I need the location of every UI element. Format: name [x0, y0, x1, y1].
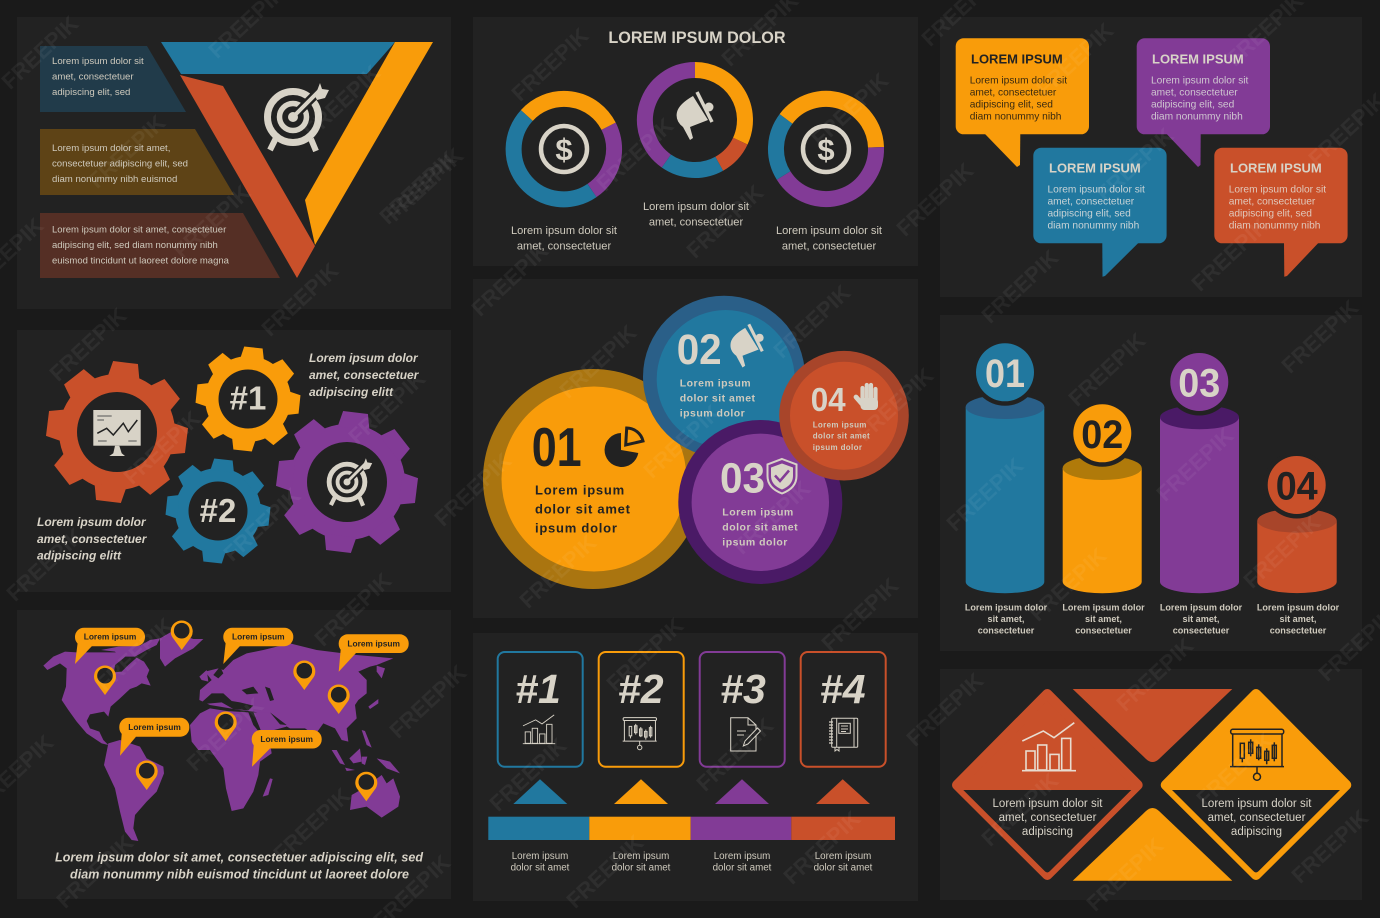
map caption — [55, 851, 423, 882]
circle 04 — [779, 351, 909, 481]
cylinder captions: sit amet, — [1183, 614, 1219, 624]
bar captions: dolor sit amet — [612, 862, 671, 873]
cylinder captions: Lorem ipsum dolor — [1257, 603, 1340, 613]
circle 03: Lorem ipsum — [722, 507, 794, 519]
circle 04: Lorem ipsum — [813, 420, 867, 429]
bubble: purple: LOREM IPSUM — [1152, 51, 1244, 66]
card #1: #1 — [515, 666, 561, 712]
watermarks: FREEPIK — [484, 733, 571, 816]
bubble: orange — [956, 38, 1089, 167]
bubble: orange: adipiscing elit, sed — [970, 100, 1053, 110]
text band: blue: adipiscing elit, sed — [52, 87, 130, 98]
watermarks: FREEPIK — [591, 113, 678, 196]
watermarks: FREEPIK — [181, 693, 268, 776]
bubble: red: amet, consectetuer — [1229, 197, 1316, 208]
text band: brown: consectetuer adipiscing elit, sed — [52, 158, 188, 170]
map: americas — [43, 632, 203, 841]
text band: maroon: euismod tincidunt ut laoreet dolore magna — [52, 256, 230, 266]
bubble: orange: LOREM IPSUM — [971, 51, 1063, 66]
bubble: orange: diam nonummy nibh — [970, 112, 1061, 122]
cylinder 02: 02 — [1081, 413, 1123, 457]
watermarks: FREEPIK — [1186, 213, 1273, 296]
watermarks: FREEPIK — [816, 573, 903, 656]
triangle segment: orange — [305, 42, 433, 245]
watermarks: FREEPIK — [298, 60, 385, 143]
diamond: orange — [1166, 694, 1346, 875]
watermarks: FREEPIK — [806, 68, 893, 151]
watermarks: FREEPIK — [218, 483, 305, 566]
panel: gears — [17, 330, 451, 592]
circle 03: ipsum dolor — [722, 537, 788, 549]
circle 02: 02 — [677, 326, 722, 374]
callout: label 1: Lorem ipsum — [84, 632, 136, 642]
bubble: blue — [1033, 148, 1167, 277]
segmented bar — [488, 817, 895, 840]
bubble: red: diam nonummy nibh — [1229, 221, 1320, 232]
pin: australia — [355, 772, 377, 801]
watermarks: FREEPIK — [168, 180, 255, 263]
panel: donut charts — [473, 17, 918, 266]
circle 03: dolor sit amet — [722, 522, 798, 534]
bar captions: Lorem ipsum — [512, 851, 568, 862]
triangle segment: blue — [161, 42, 395, 74]
donut 3: $ — [817, 132, 835, 167]
bubble: orange: Lorem ipsum dolor sit — [970, 76, 1067, 86]
watermarks: FREEPIK — [1031, 18, 1118, 101]
bar captions: Lorem ipsum — [613, 851, 669, 862]
watermarks: FREEPIK — [1286, 805, 1373, 888]
bubble: blue: Lorem ipsum dolor sit — [1048, 185, 1145, 196]
circle 02 — [643, 296, 805, 458]
watermarks: FREEPIK — [561, 830, 648, 913]
watermarks: FREEPIK — [429, 448, 516, 531]
text band: blue: amet, consectetuer — [52, 72, 134, 82]
pin: south america — [136, 760, 158, 790]
text: lower left: adipiscing elitt — [37, 548, 122, 562]
cylinder captions: consectetuer — [1075, 625, 1132, 635]
watermarks: FREEPIK — [768, 280, 855, 363]
cylinder 03: 03 — [1178, 362, 1220, 406]
gear: yellow #1: #1 — [230, 380, 266, 416]
gear: blue #2 — [161, 454, 275, 568]
gear: red with monitor — [39, 354, 195, 510]
icon: target — [268, 83, 329, 151]
text: lower left — [37, 515, 148, 562]
diamond: orange: amet, consectetuer — [1208, 812, 1306, 824]
cylinder 04 — [1257, 452, 1337, 593]
donut 1 — [514, 99, 614, 199]
callout: label 4 — [119, 718, 189, 756]
cylinder 01: 01 — [985, 352, 1025, 396]
cylinder captions: sit amet, — [1280, 614, 1316, 624]
bubble: purple: adipiscing elit, sed — [1151, 100, 1235, 110]
bar captions: Lorem ipsum — [714, 851, 770, 862]
panel: target triangle — [17, 17, 451, 309]
watermarks: FREEPIK — [343, 366, 430, 449]
cylinder captions — [965, 603, 1340, 635]
watermarks: FREEPIK — [1276, 295, 1363, 378]
watermarks: FREEPIK — [691, 713, 778, 796]
card #3 — [700, 652, 785, 767]
watermarks: FREEPIK — [1091, 123, 1178, 206]
cylinder captions: Lorem ipsum dolor — [1062, 603, 1145, 613]
bubble: blue: adipiscing elit, sed — [1048, 209, 1131, 220]
pins — [94, 620, 377, 801]
watermarks: FREEPIK — [514, 530, 601, 613]
callout: label 1 — [75, 628, 145, 664]
cylinder captions: Lorem ipsum dolor — [1160, 603, 1243, 613]
watermarks: FREEPIK — [1063, 328, 1150, 411]
donut captions: Lorem ipsum dolor sit — [776, 225, 882, 237]
watermarks: FREEPIK — [268, 783, 355, 866]
text band: maroon: adipiscing elit, sed diam nonummy nibh — [52, 240, 218, 251]
callout: label 2: Lorem ipsum — [232, 632, 285, 642]
bubble: blue: amet, consectetuer — [1048, 197, 1135, 208]
panel: diamonds — [940, 669, 1362, 900]
bar captions — [511, 851, 873, 873]
text band: maroon: Lorem ipsum dolor sit amet, consectetuer — [52, 224, 226, 236]
watermarks: FREEPIK — [851, 363, 938, 446]
donut 3 — [776, 99, 876, 199]
bubble: red: Lorem ipsum dolor sit — [1229, 185, 1326, 196]
panel: speech bubbles — [940, 17, 1362, 297]
watermarks: FREEPIK — [1191, 728, 1278, 811]
text band: brown: diam nonummy nibh euismod — [52, 174, 177, 185]
text band: maroon — [40, 213, 280, 278]
panel: world map — [17, 610, 451, 899]
text: upper right: adipiscing elitt — [309, 385, 394, 399]
watermarks: FREEPIK — [601, 613, 688, 696]
heading: LOREM IPSUM DOLOR — [608, 29, 786, 47]
diamond: red — [957, 694, 1138, 875]
pin: greenland — [171, 620, 193, 650]
bubble: purple — [1137, 38, 1270, 167]
donut captions: Lorem ipsum dolor sit — [511, 225, 617, 237]
diamond: red: Lorem ipsum dolor sit — [993, 798, 1103, 810]
watermarks: FREEPIK — [638, 400, 725, 483]
cylinder captions: sit amet, — [1085, 614, 1122, 624]
circle 04: dolor sit amet — [813, 432, 870, 441]
circle 03: 03 — [720, 455, 765, 503]
watermarks: FREEPIK — [381, 143, 468, 226]
callout: label 3: Lorem ipsum — [347, 638, 400, 648]
circle 01: dolor sit amet — [535, 501, 631, 516]
card #4 — [801, 652, 886, 767]
watermarks: FREEPIK — [374, 146, 461, 229]
circle 01: Lorem ipsum — [535, 482, 625, 497]
gear: yellow #1 — [191, 342, 305, 456]
donut captions: Lorem ipsum dolor sit — [643, 201, 749, 213]
cylinder 03 — [1160, 348, 1239, 593]
watermarks: FREEPIK — [1024, 543, 1111, 626]
callout: label 5: Lorem ipsum — [260, 734, 313, 744]
bubble: blue: diam nonummy nibh — [1048, 221, 1139, 232]
text band: blue — [40, 46, 186, 112]
diamond: red: amet, consectetuer — [999, 812, 1097, 824]
card #1 — [498, 652, 583, 767]
bubble: red: LOREM IPSUM — [1230, 161, 1322, 176]
pin: africa — [215, 711, 237, 741]
text band: brown: Lorem ipsum dolor sit amet, — [52, 143, 170, 154]
diamond: orange: Lorem ipsum dolor sit — [1202, 798, 1312, 810]
watermarks: FREEPIK — [506, 23, 593, 106]
circle 03 — [678, 420, 842, 584]
bar captions: dolor sit amet — [713, 862, 772, 873]
callout: label 5 — [252, 730, 322, 767]
watermarks: FREEPIK — [1081, 833, 1168, 916]
watermarks: FREEPIK — [976, 245, 1063, 328]
watermarks: FREEPIK — [466, 238, 553, 321]
watermarks: FREEPIK — [118, 406, 205, 489]
watermarks: FREEPIK — [256, 258, 343, 341]
watermarks: FREEPIK — [554, 320, 641, 403]
bubble: purple: diam nonummy nibh — [1151, 112, 1243, 122]
map caption: Lorem ipsum dolor sit amet, consectetuer adipiscing elit, sed — [55, 851, 423, 865]
donut captions — [511, 201, 882, 252]
circle 01 — [483, 369, 703, 589]
cylinder captions: sit amet, — [988, 614, 1024, 624]
cylinder captions: consectetuer — [1173, 625, 1230, 635]
bar captions: Lorem ipsum — [815, 851, 871, 862]
donut 2 — [645, 70, 745, 170]
watermarks: FREEPIK — [1238, 510, 1325, 593]
watermarks: FREEPIK — [91, 613, 178, 696]
panel: numbered cards — [473, 633, 918, 901]
cylinder 01 — [966, 339, 1044, 593]
watermarks: FREEPIK — [309, 568, 396, 651]
bubble: orange: amet, consectetuer — [970, 88, 1057, 98]
donut 1: $ — [555, 132, 573, 167]
top triangle — [1073, 689, 1232, 762]
watermarks: FREEPIK — [1151, 423, 1238, 506]
bubble: purple: amet, consectetuer — [1151, 88, 1238, 98]
circle 04: ipsum dolor — [813, 443, 862, 452]
map: africa, eurasia, australia — [190, 643, 400, 818]
bottom triangle — [1073, 808, 1232, 881]
pin: russia — [293, 660, 315, 690]
cylinder captions: Lorem ipsum dolor — [965, 603, 1048, 613]
pin: north america — [94, 665, 116, 695]
circle 02: ipsum dolor — [680, 408, 745, 420]
circle 04: 04 — [811, 381, 846, 418]
circle 02: dolor sit amet — [680, 393, 756, 405]
triangle segment: red — [180, 75, 315, 278]
donut captions: amet, consectetuer — [649, 216, 743, 228]
cylinder 04: 04 — [1276, 465, 1318, 509]
text: upper right — [309, 351, 420, 399]
diamond: red: adipiscing — [1022, 826, 1073, 838]
watermarks: FREEPIK — [1111, 633, 1198, 716]
text: upper right: Lorem ipsum dolor — [309, 351, 419, 365]
text: lower left: amet, consectetuer — [37, 532, 148, 546]
card #3: #3 — [720, 666, 766, 712]
watermarks: FREEPIK — [976, 768, 1063, 851]
pin: china — [328, 684, 350, 714]
map caption: diam nonummy nibh euismod tincidunt ut laoreet dolore — [70, 868, 409, 882]
watermarks: FREEPIK — [51, 830, 138, 913]
bubble: red — [1214, 148, 1348, 277]
gear: blue #2: #2 — [200, 492, 236, 529]
text band: brown — [40, 129, 234, 195]
watermarks: FREEPIK — [728, 476, 815, 559]
watermarks: FREEPIK — [901, 668, 988, 751]
callout: label 2 — [223, 628, 293, 664]
watermarks: FREEPIK — [1, 523, 88, 606]
callout: label 3 — [339, 634, 409, 672]
diamond: orange: adipiscing — [1231, 826, 1282, 838]
text: lower left: Lorem ipsum dolor — [37, 515, 147, 529]
donut captions: amet, consectetuer — [517, 240, 611, 252]
circle 01: ipsum dolor — [535, 521, 618, 536]
bar captions: dolor sit amet — [814, 862, 873, 873]
watermarks: FREEPIK — [778, 806, 865, 889]
bubble: red: adipiscing elit, sed — [1229, 209, 1312, 220]
card #4: #4 — [820, 666, 866, 712]
watermarks: FREEPIK — [891, 158, 978, 241]
circle 01: 01 — [532, 416, 582, 478]
panel: overlapping circles — [473, 279, 918, 618]
watermarks: FREEPIK — [83, 110, 170, 193]
watermarks: FREEPIK — [941, 453, 1028, 536]
watermarks: FREEPIK — [681, 180, 768, 263]
watermarks: FREEPIK — [384, 660, 471, 743]
text band: blue: Lorem ipsum dolor sit — [52, 56, 144, 67]
bubble: blue: LOREM IPSUM — [1049, 161, 1141, 176]
callout: label 4: Lorem ipsum — [128, 722, 181, 732]
panel: cylinder chart — [940, 315, 1362, 651]
pointer triangles — [513, 779, 870, 804]
watermarks: FREEPIK — [44, 303, 131, 386]
card #2: #2 — [618, 666, 664, 712]
text: upper right: amet, consectetuer — [309, 368, 420, 382]
bar captions: dolor sit amet — [511, 862, 570, 873]
bubble: purple: Lorem ipsum dolor sit — [1151, 76, 1249, 86]
cylinder 02 — [1063, 400, 1142, 593]
donut captions: amet, consectetuer — [782, 240, 876, 252]
cylinder captions: consectetuer — [1270, 625, 1327, 635]
cylinder captions: consectetuer — [978, 625, 1035, 635]
world map — [43, 632, 400, 841]
card #2 — [599, 652, 684, 767]
gear: purple with target — [269, 404, 425, 560]
circle 02: Lorem ipsum — [680, 378, 751, 390]
